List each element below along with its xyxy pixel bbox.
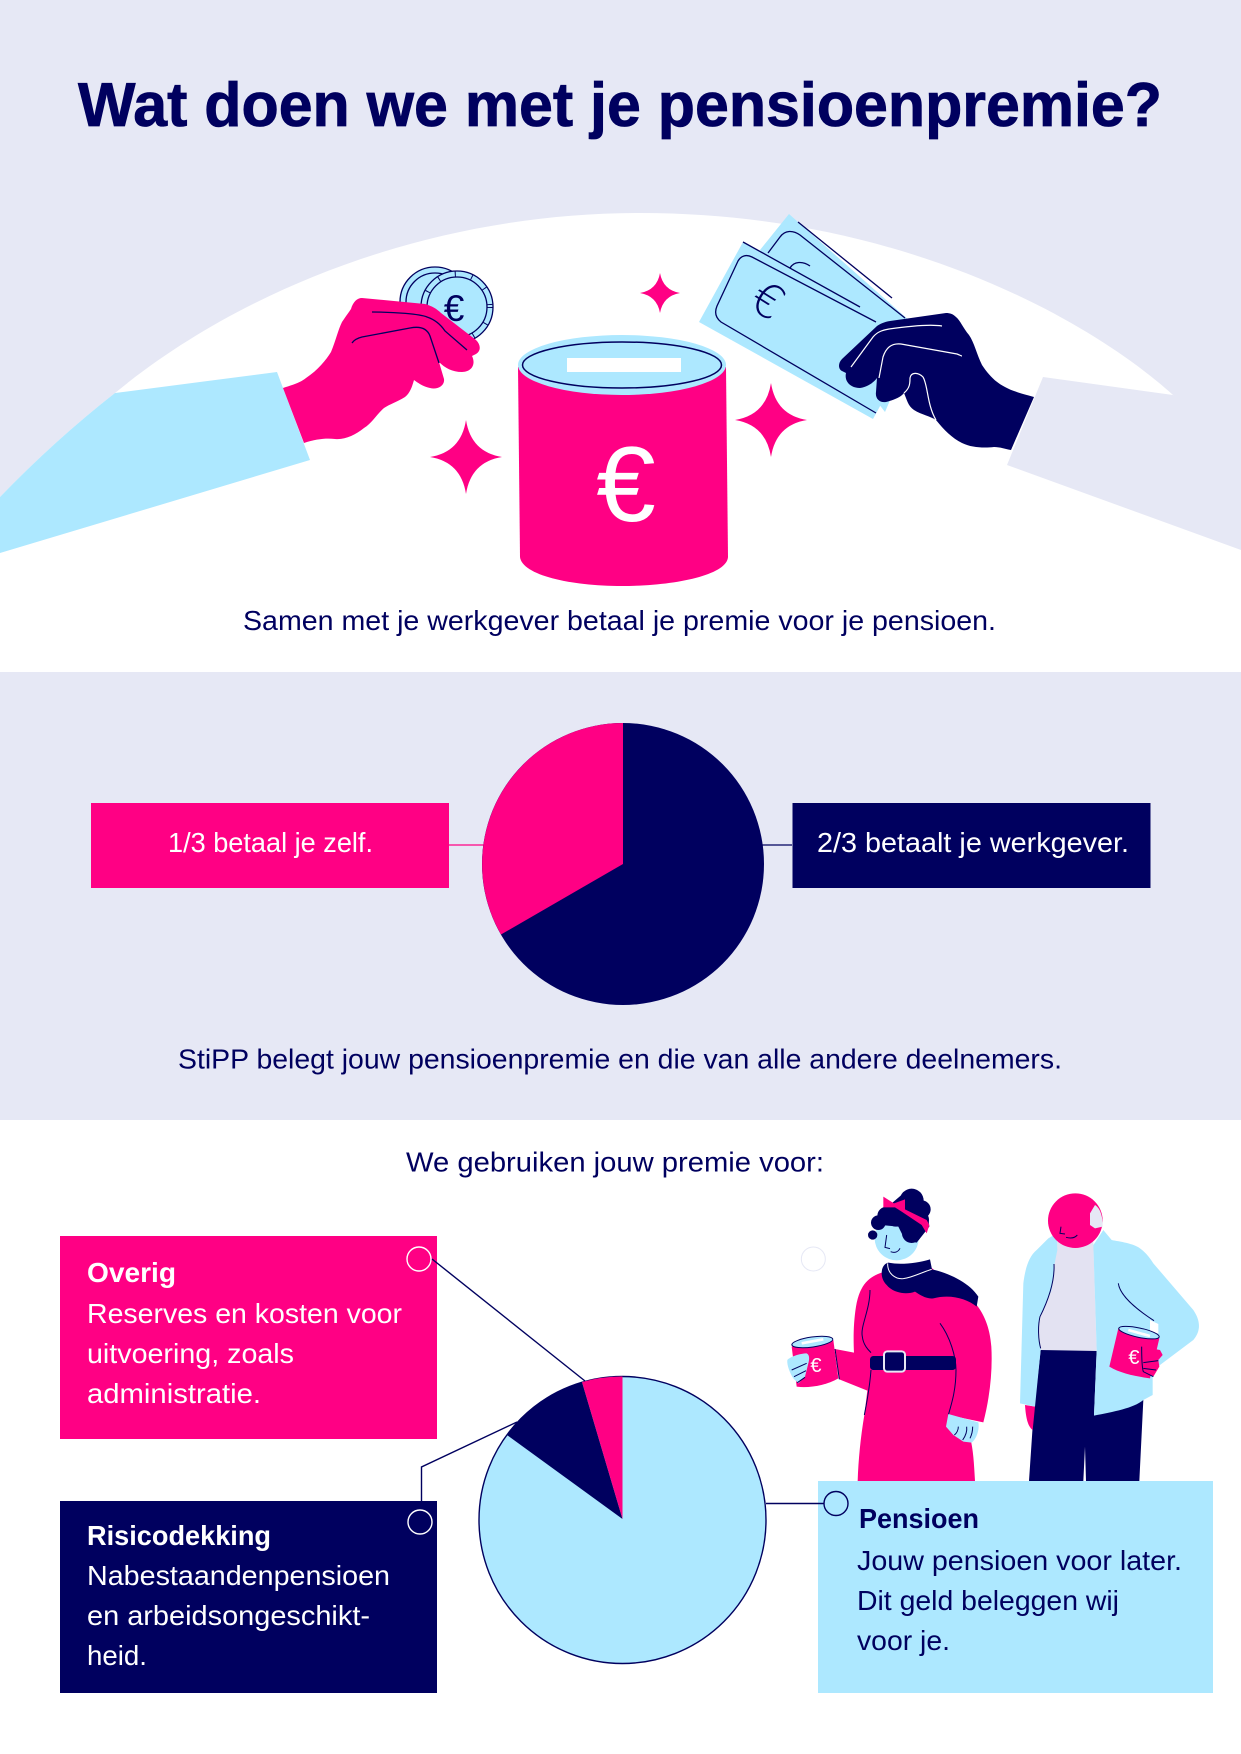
pie chart: contribution split: [482, 723, 764, 1005]
label: employer share: [792, 803, 1150, 888]
caption: investing: StiPP belegt jouw pensioenpremie en die van alle andere deelnemers.: [178, 1044, 1062, 1074]
caption: premium: Samen met je werkgever betaal je premie voor je pensioen.: [243, 605, 996, 636]
man: [1020, 1193, 1199, 1481]
panel: Overig: Reserves en kosten voor: [87, 1298, 402, 1329]
label: employer share: 2/3 betaalt je werkgever.: [817, 827, 1129, 858]
left sleeve: [0, 372, 310, 553]
title: Wat doen we met je pensioenpremie?: [78, 71, 1162, 140]
panel: Risicodekking: heid.: [87, 1640, 147, 1671]
woman: [787, 1189, 992, 1481]
panel: Pensioen: Jouw pensioen voor later.: [857, 1545, 1182, 1576]
panel: top illustration section: [0, 0, 1241, 672]
label: employee share: 1/3 betaal je zelf.: [168, 827, 373, 858]
icon: bank notes: €: [741, 270, 794, 331]
money box: €: [596, 424, 656, 544]
white dome: [0, 213, 1241, 672]
pie connector lines: [422, 1259, 824, 1504]
panel: Risicodekking: en arbeidsongeschikt-: [87, 1600, 370, 1631]
panel: Pensioen: Pensioen: [859, 1503, 979, 1534]
panel: Overig: administratie.: [87, 1378, 261, 1409]
connector lines: [449, 844, 792, 846]
icon: coins: [400, 267, 493, 343]
illustration: two people: [787, 1189, 1199, 1481]
panel: Overig: Overig: [87, 1257, 176, 1288]
panel: Risicodekking: [60, 1501, 437, 1693]
panel: Pensioen: [818, 1481, 1213, 1693]
panel: Pensioen: Dit geld beleggen wij: [857, 1585, 1119, 1616]
label: employee share: [91, 803, 449, 888]
man: €: [1128, 1347, 1140, 1369]
icon: sparkle right: [735, 383, 807, 457]
right sleeve: [1007, 377, 1241, 550]
icon: coins: €: [444, 288, 465, 329]
icon: bank notes: [699, 214, 920, 419]
panel: Pensioen: voor je.: [857, 1625, 950, 1656]
heading: premium use: We gebruiken jouw premie voor:: [406, 1146, 824, 1178]
icon: sparkle top: [640, 273, 680, 313]
panel: Risicodekking: Nabestaandenpensioen: [87, 1560, 390, 1591]
money box: [518, 335, 728, 586]
panel: contribution split: [0, 672, 1241, 1120]
icon: navy hand: [839, 313, 1034, 450]
panel: Overig: uitvoering, zoals: [87, 1338, 294, 1369]
icon: sparkle left: [430, 420, 502, 494]
woman: €: [810, 1355, 822, 1377]
decorative ring: [801, 1247, 825, 1271]
panel: Overig: [60, 1236, 437, 1439]
panel: Risicodekking: Risicodekking: [87, 1520, 271, 1551]
pie chart: premium use: [479, 1376, 766, 1664]
icon: pink hand: [283, 298, 480, 443]
